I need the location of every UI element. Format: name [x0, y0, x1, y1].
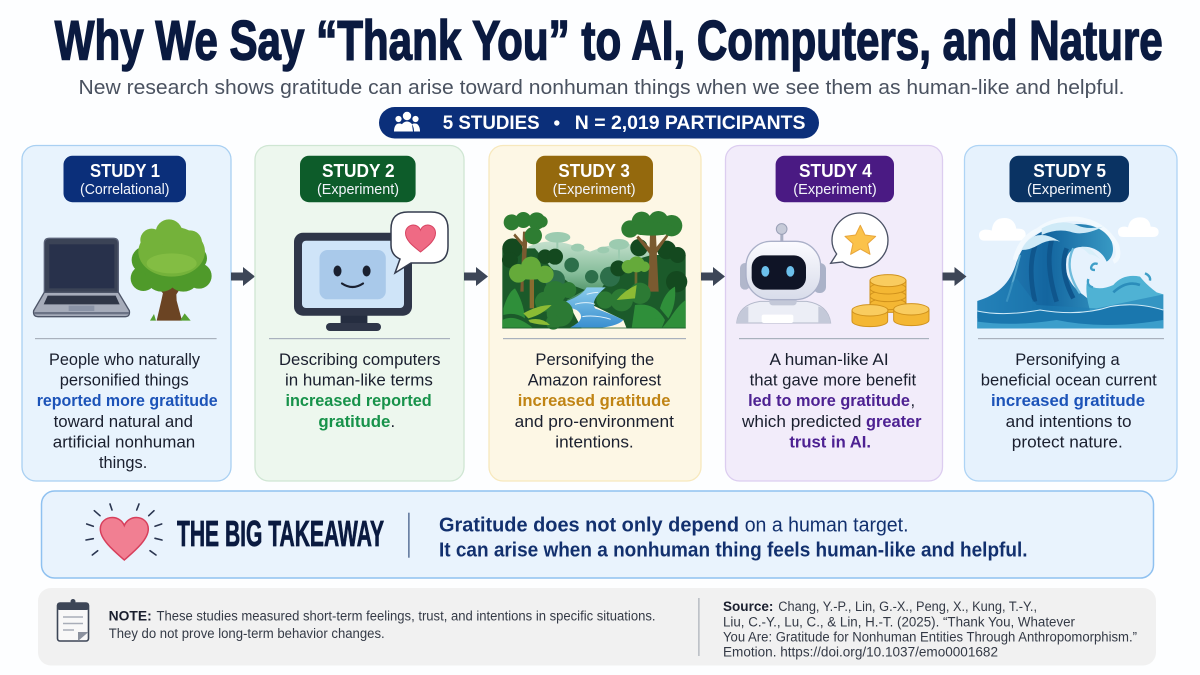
icon: coin stacks: [852, 275, 929, 327]
badge: 5 studies, N = 2,019 participants: [379, 107, 819, 138]
study 2 text: .: [390, 413, 395, 431]
source citation: Emotion. https://doi.org/10.1037/emo0001682: [723, 644, 998, 660]
canopy right tall: [621, 211, 682, 238]
icon: star speech bubble: [831, 213, 888, 268]
study 3 text: Amazon rainforest: [528, 372, 662, 390]
icon: people: [394, 112, 420, 132]
shrubs: [535, 281, 651, 330]
study 1 badge: (Correlational): [80, 181, 170, 198]
river: [560, 287, 623, 328]
study 1 badge: [64, 156, 186, 202]
study 5 text: and intentions to: [1006, 413, 1132, 431]
misty background: [528, 241, 652, 305]
divider: [35, 338, 217, 339]
divider: [269, 338, 450, 339]
icon: robot: [737, 224, 831, 323]
icon: laptop: [34, 238, 129, 317]
source citation: Liu, C.-Y., Lu, C., & Lin, H.-T. (2025). “Thank You, Whatever: [723, 614, 1075, 630]
study 1 text: [37, 351, 218, 472]
study 1 text: People who naturally: [49, 351, 201, 369]
arrow 1: [231, 267, 255, 286]
trunks: [513, 232, 669, 292]
study 4 text: [741, 351, 922, 451]
source citation: Source:: [723, 599, 773, 614]
note text: They do not prove long-term behavior changes.: [109, 626, 385, 641]
note text: [109, 609, 655, 641]
icon: smiling computer with heart bubble: [294, 212, 448, 331]
study 4 badge: STUDY 4: [799, 160, 872, 181]
takeaway message: on a human target.: [745, 515, 908, 537]
study 2 badge: (Experiment): [317, 181, 399, 198]
icon: tree: [131, 219, 212, 321]
study 2 badge: [300, 156, 416, 202]
study 3 text: Personifying the: [535, 351, 654, 369]
study 5 badge: STUDY 5: [1033, 160, 1106, 181]
dark forest masses: [502, 248, 686, 328]
source citation: Chang, Y.-P., Lin, G.-X., Peng, X., Kung, T.-Y.,: [778, 599, 1037, 614]
light trees: [509, 256, 650, 283]
study 3 text: [515, 351, 674, 451]
study 1 text: toward natural and: [54, 413, 193, 431]
panel: study 4: [726, 146, 942, 481]
arrow 4: [942, 267, 966, 286]
study 4 badge: [776, 156, 894, 202]
study 2 text: Describing computers: [279, 351, 440, 369]
divider: [503, 338, 686, 339]
illustration: rainforest and river: [502, 211, 687, 330]
takeaway message: Gratitude does not only depend: [439, 515, 739, 537]
arrow 3: [701, 267, 725, 286]
study 5 text: [981, 351, 1157, 451]
study 1 text: artificial nonhuman: [53, 433, 195, 451]
arrow 2: [464, 267, 488, 286]
study 2 text: gratitude: [318, 413, 390, 431]
takeaway message: [439, 515, 1028, 562]
study 1 text: reported more gratitude: [37, 392, 218, 410]
study 2 text: in human-like terms: [285, 372, 433, 390]
study 3 text: intentions.: [555, 433, 634, 451]
divider: [978, 338, 1164, 339]
note text: These studies measured short-term feelings, trust, and intentions in specific situations.: [156, 609, 656, 624]
panel: study 5: [964, 146, 1177, 481]
study 1 badge: STUDY 1: [90, 160, 160, 181]
panel: the big takeaway: [42, 491, 1154, 578]
source citation: You Are: Gratitude for Nonhuman Entities Through Anthropomorphism.”: [723, 630, 1137, 644]
illustration: ocean wave: [977, 217, 1163, 328]
badge: 5 studies, N = 2,019 participants: N = 2,019 PARTICIPANTS: [575, 113, 806, 134]
study 2 text: [279, 351, 440, 431]
study 4 text: greater: [866, 413, 922, 431]
takeaway message: It can arise when a nonhuman thing feels human-like and helpful.: [439, 540, 1028, 562]
study 4 text: led to more gratitude: [748, 392, 910, 410]
study 1 text: personified things: [60, 372, 189, 390]
study 4 text: ,: [910, 392, 915, 410]
study 5 text: Personifying a: [1015, 351, 1121, 369]
study 2 text: increased reported: [286, 392, 432, 410]
divider: [739, 338, 929, 339]
foreground leaves: [502, 287, 686, 328]
panel: note and source: [38, 588, 1156, 666]
note text: NOTE:: [109, 609, 152, 624]
icon: heart with rays: [86, 504, 162, 560]
study 4 text: trust in AI.: [789, 433, 871, 451]
study 3 badge: (Experiment): [553, 181, 636, 198]
panel: study 2: [255, 146, 464, 481]
takeaway heading: THE BIG TAKEAWAY: [177, 513, 384, 554]
study 4 text: that gave more benefit: [750, 372, 917, 390]
study 5 text: increased gratitude: [991, 392, 1145, 410]
study 4 badge: (Experiment): [793, 181, 877, 198]
canopy left tall: [504, 212, 548, 244]
study 3 text: and pro-environment: [515, 413, 674, 431]
study 5 badge: [1010, 156, 1129, 202]
study 5 text: beneficial ocean current: [981, 372, 1157, 390]
study 3 text: increased gratitude: [518, 392, 670, 410]
panel: study 1: [22, 146, 231, 481]
study 2 badge: STUDY 2: [322, 160, 395, 181]
study 4 text: which predicted: [741, 413, 861, 431]
study 4 text: A human-like AI: [770, 351, 889, 369]
study 5 badge: (Experiment): [1027, 181, 1112, 198]
study 3 badge: [536, 156, 653, 202]
study 3 badge: STUDY 3: [558, 160, 630, 181]
study 5 text: protect nature.: [1012, 433, 1123, 451]
icon: clipboard: [58, 599, 88, 641]
panel: study 3: [489, 146, 701, 481]
study 1 text: things.: [99, 454, 147, 472]
source citation: [723, 599, 1137, 660]
subtitle: New research shows gratitude can arise toward nonhuman things when we see them as human-like and helpful.: [78, 77, 1124, 99]
badge: 5 studies, N = 2,019 participants: 5 STUDIES: [443, 113, 540, 134]
